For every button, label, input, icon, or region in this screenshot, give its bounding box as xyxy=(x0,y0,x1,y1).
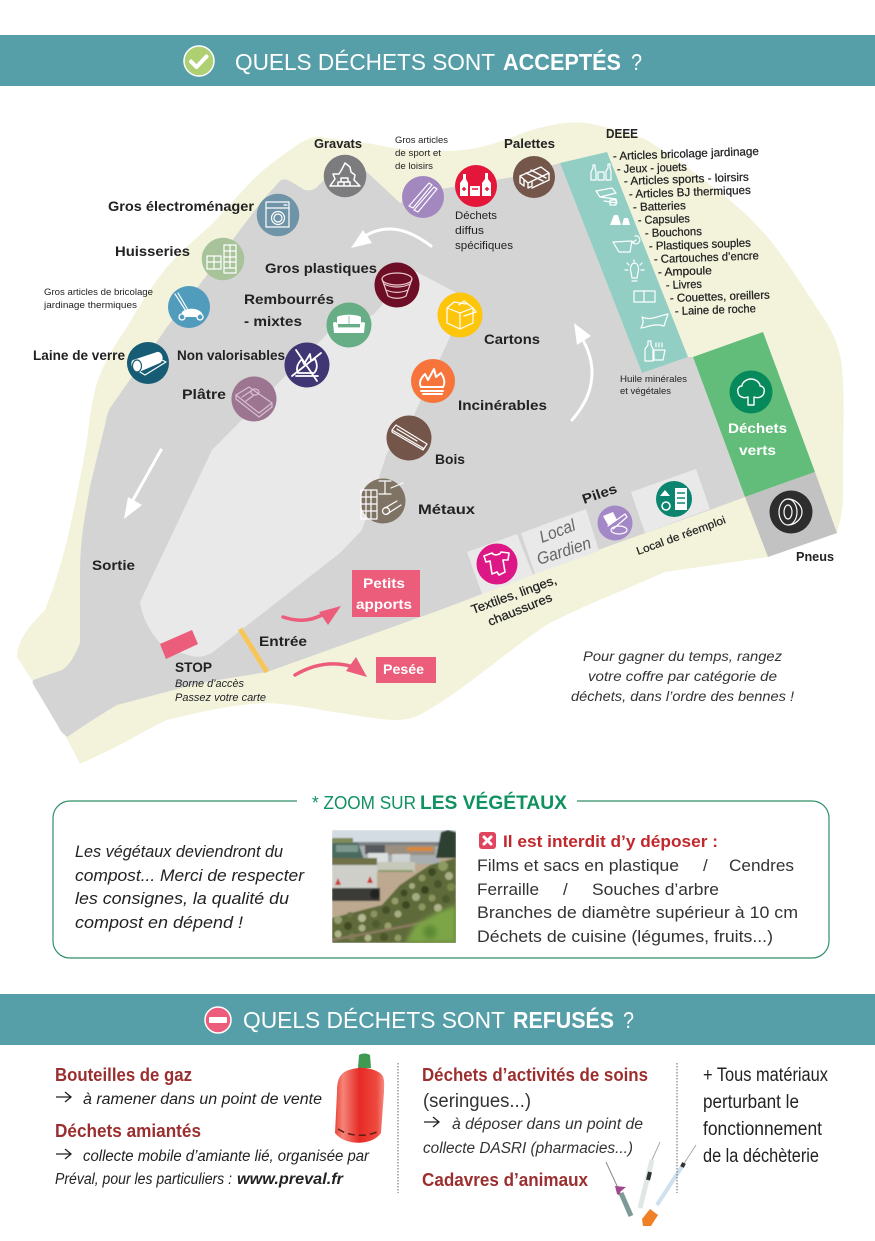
heading: accepted: QUELS DÉCHETS SONT xyxy=(235,49,495,75)
label: Métaux: Métaux xyxy=(418,501,475,517)
label: oils: Huile minérales xyxy=(620,374,688,384)
refused column 3: fonctionnement xyxy=(703,1119,823,1140)
local gardien block xyxy=(521,509,599,574)
refused column 3: + Tous matériaux xyxy=(703,1065,828,1086)
panel heading: LES VÉGÉTAUX xyxy=(420,792,567,814)
DEEE list: - Articles BJ thermiques xyxy=(629,185,751,201)
arrow: gas xyxy=(56,1092,71,1102)
label: Local de réemploi: Local de réemploi xyxy=(635,514,727,558)
map: cream ground xyxy=(17,122,844,764)
icon: light bulb xyxy=(625,260,644,281)
tip text: votre coffre par catégorie de xyxy=(588,668,777,684)
DEEE list: - Couettes, oreillers xyxy=(670,290,770,305)
arrow: to small deposits xyxy=(283,606,341,625)
tip text: déchets, dans l’ordre des bennes ! xyxy=(571,688,794,704)
icon: tree xyxy=(730,370,772,414)
icon: no entry xyxy=(205,1007,231,1033)
icon: skis xyxy=(402,176,444,218)
care instructions: à déposer dans un point de xyxy=(452,1116,643,1133)
heading: accepted xyxy=(235,48,642,75)
label: STOP: Passez votre carte xyxy=(175,692,266,704)
forbidden list: Déchets de cuisine (légumes, fruits...) xyxy=(477,927,773,946)
label: Gros électroménager: Gros électroménager xyxy=(108,198,255,214)
label: Gravats: Gravats xyxy=(314,136,362,151)
asbestos instructions: Préval, pour les particuliers : xyxy=(55,1171,232,1188)
label: Non valorisables: Non valorisables xyxy=(177,347,285,363)
header band: refused waste xyxy=(0,994,875,1045)
label: Gros plastiques: Gros plastiques xyxy=(265,260,377,276)
DEEE list xyxy=(613,146,770,318)
label: Cartons: Cartons xyxy=(484,331,540,347)
heading: accepted: ? xyxy=(631,49,642,75)
label: DEEE: DEEE xyxy=(606,126,638,141)
DEEE strip xyxy=(560,152,688,373)
icon: watering can xyxy=(613,236,640,252)
icon: washing machine xyxy=(257,194,299,236)
label: Pneus: Pneus xyxy=(796,550,834,564)
map: grey road xyxy=(33,157,745,736)
label: Bois: Bois xyxy=(435,451,465,467)
forbidden list: Cendres xyxy=(729,856,794,875)
care instructions: collecte DASRI (pharmacies...) xyxy=(423,1140,633,1157)
label: Déchets diffus spécifiques: diffus xyxy=(455,225,485,237)
compost text: les consignes, la qualité du xyxy=(75,889,290,908)
asbestos instructions: collecte mobile d’amiante lié, organisée par xyxy=(83,1148,370,1165)
asbestos instructions: www.preval.fr xyxy=(237,1171,344,1188)
green waste block xyxy=(693,332,815,497)
label: Rembourrés mixtes xyxy=(244,291,334,329)
arrow: care waste xyxy=(424,1117,439,1127)
label box: Petits apports xyxy=(352,570,420,617)
label: Déchets verts: Déchets xyxy=(728,420,787,436)
heading: accepted: ACCEPTÉS xyxy=(503,48,621,75)
care waste: Déchets d’activités de soins xyxy=(422,1065,648,1085)
arrow: to weighing xyxy=(295,657,367,677)
DEEE list: - Ampoule xyxy=(658,265,712,279)
DEEE list: - Batteries xyxy=(633,200,686,214)
icon: metals xyxy=(360,478,406,524)
map labels xyxy=(33,126,834,704)
icon: hazardous products xyxy=(455,165,497,207)
label: oils xyxy=(620,374,688,396)
DEEE list: - Bouchons xyxy=(645,226,702,240)
icon: rubble xyxy=(324,155,366,197)
icon: lawn mower xyxy=(168,286,210,328)
label box: Petits apports: apports xyxy=(356,596,412,612)
label: Piles: Piles xyxy=(580,481,619,507)
forbidden list: Souches d’arbre xyxy=(592,880,719,899)
forbidden list: Ferraille xyxy=(477,880,539,899)
icon: cardboard box xyxy=(438,292,482,338)
divider 1 xyxy=(397,1063,399,1193)
forbidden heading: Il est interdit d’y déposer : xyxy=(503,832,718,851)
forbidden list xyxy=(477,856,798,946)
icon: glass wool roll xyxy=(127,342,169,384)
icon: bottles xyxy=(591,164,611,180)
heading: refused: ? xyxy=(623,1007,634,1033)
label: Incinérables: Incinérables xyxy=(458,397,547,413)
icon: non recoverable xyxy=(284,342,330,388)
gas bottles: Bouteilles de gaz xyxy=(55,1065,192,1085)
label: Local Gardien xyxy=(534,515,593,569)
label: Palettes: Palettes xyxy=(504,136,555,151)
label: gardening tools xyxy=(43,287,153,310)
icon: plaster board xyxy=(232,376,276,422)
icon: plastic basin xyxy=(374,262,420,308)
icon: pillow xyxy=(641,314,668,328)
label box: Petits apports: Petits xyxy=(363,575,405,591)
label: Entrée: Entrée xyxy=(259,633,307,649)
icon: pallet xyxy=(513,156,555,198)
label box: Pesée xyxy=(376,657,436,683)
header band: accepted waste xyxy=(0,35,875,86)
label: Déchets verts xyxy=(728,420,787,458)
DEEE list: - Articles sports - loirsirs xyxy=(624,172,749,188)
label: Plâtre: Plâtre xyxy=(182,386,226,402)
arrow: right curve xyxy=(572,323,592,420)
stop bar xyxy=(160,630,198,659)
DEEE list: - Jeux - jouets xyxy=(617,162,687,176)
label box: Pesée: Pesée xyxy=(383,661,424,677)
icon: reuse furniture xyxy=(656,481,692,517)
map: central island xyxy=(140,263,457,657)
label: Textiles: Textiles, linges, xyxy=(469,573,559,617)
care instructions xyxy=(423,1116,643,1157)
label: STOP: Borne d’accès xyxy=(175,678,244,690)
heading: refused: QUELS DÉCHETS SONT xyxy=(243,1007,505,1033)
icon: red cross xyxy=(479,832,496,849)
forbidden list: Branches de diamètre supérieur à 10 cm xyxy=(477,903,798,922)
arrow: top curve xyxy=(351,229,431,248)
photo: trailer of branches xyxy=(332,830,456,943)
arrow: asbestos xyxy=(56,1149,71,1159)
label: oils: et végétales xyxy=(620,386,672,396)
refused column 3: perturbant le xyxy=(703,1092,799,1113)
arrow: exit xyxy=(124,450,161,519)
label: gardening tools: Gros articles de bricolage xyxy=(44,287,153,297)
textile block xyxy=(467,534,533,594)
icon: flame xyxy=(411,359,455,403)
label: Déchets diffus spécifiques xyxy=(455,210,514,252)
panel heading xyxy=(312,792,567,814)
DEEE list: - Livres xyxy=(666,279,702,292)
label: Local Gardien: Local xyxy=(537,515,579,547)
reuse block xyxy=(631,469,710,533)
refused column 3: de la déchèterie xyxy=(703,1146,819,1167)
tip text xyxy=(571,648,794,704)
forbidden list: / xyxy=(563,880,568,899)
label: Sortie: Sortie xyxy=(92,557,135,573)
label: Local Gardien: Gardien xyxy=(534,533,593,569)
compost text xyxy=(75,842,305,932)
icon: sofa xyxy=(326,302,372,348)
asbestos instructions xyxy=(55,1148,370,1188)
label: sports items: de sport et xyxy=(395,148,442,158)
label: sports items: de loisirs xyxy=(395,161,434,171)
label: gardening tools: jardinage thermiques xyxy=(43,300,138,310)
label: STOP xyxy=(175,659,266,704)
label: Huisseries: Huisseries xyxy=(115,243,190,259)
refused column 1 xyxy=(55,1054,384,1188)
DEEE strip icons xyxy=(591,164,668,361)
label: Déchets diffus spécifiques: spécifiques xyxy=(455,240,514,252)
forbidden list: / xyxy=(703,856,708,875)
forbidden list: Films et sacs en plastique xyxy=(477,856,679,875)
label: Déchets diffus spécifiques: Déchets xyxy=(455,210,498,222)
entry line xyxy=(240,629,267,672)
icon: oil containers xyxy=(645,341,665,361)
tip text: Pour gagner du temps, rangez xyxy=(583,648,782,664)
label: Déchets verts: verts xyxy=(739,442,776,458)
panel: zoom on plants xyxy=(53,792,829,958)
label: Textiles: chaussures xyxy=(486,590,554,629)
label: STOP: STOP xyxy=(175,659,212,675)
syringes illustration xyxy=(606,1142,696,1226)
icon: green check xyxy=(184,46,214,76)
refused column 3 xyxy=(703,1065,828,1167)
panel heading: * ZOOM SUR xyxy=(312,793,416,813)
icon: open book xyxy=(634,291,655,302)
DEEE list: - Cartouches d’encre xyxy=(654,250,759,266)
heading: refused xyxy=(243,1006,634,1033)
heading: refused: REFUSÉS xyxy=(513,1006,614,1033)
label: Rembourrés mixtes: - mixtes xyxy=(244,313,302,329)
asbestos: Déchets amiantés xyxy=(55,1121,201,1141)
icon: wood slats xyxy=(596,188,617,205)
label: sports items: Gros articles xyxy=(395,135,449,145)
DEEE list: - Articles bricolage jardinage xyxy=(613,146,759,163)
icon: wood beam xyxy=(386,416,432,460)
tyre block xyxy=(745,472,837,557)
gas instructions: à ramener dans un point de vente xyxy=(83,1091,322,1108)
icon: capsules xyxy=(610,215,630,225)
compost text: compost... Merci de respecter xyxy=(75,866,305,885)
compost text: Les végétaux deviendront du xyxy=(75,842,284,861)
refused column 2 xyxy=(422,1065,696,1226)
DEEE list: - Plastiques souples xyxy=(649,237,751,253)
label: Rembourrés mixtes: Rembourrés xyxy=(244,291,334,307)
animal carcasses: Cadavres d’animaux xyxy=(422,1170,588,1190)
DEEE list: - Capsules xyxy=(638,213,690,227)
compost text: compost en dépend ! xyxy=(75,913,243,932)
label: sports items xyxy=(395,135,449,171)
divider 2 xyxy=(676,1063,678,1193)
label: Laine de verre: Laine de verre xyxy=(33,347,125,363)
gas cylinder illustration xyxy=(335,1054,384,1143)
DEEE list: - Laine de roche xyxy=(675,303,756,318)
icon: batteries xyxy=(598,506,632,540)
icon: windows and doors xyxy=(202,238,244,280)
syringes note: (seringues...) xyxy=(423,1091,531,1112)
icon: t-shirt xyxy=(476,544,518,584)
icon: tyre xyxy=(770,490,812,534)
